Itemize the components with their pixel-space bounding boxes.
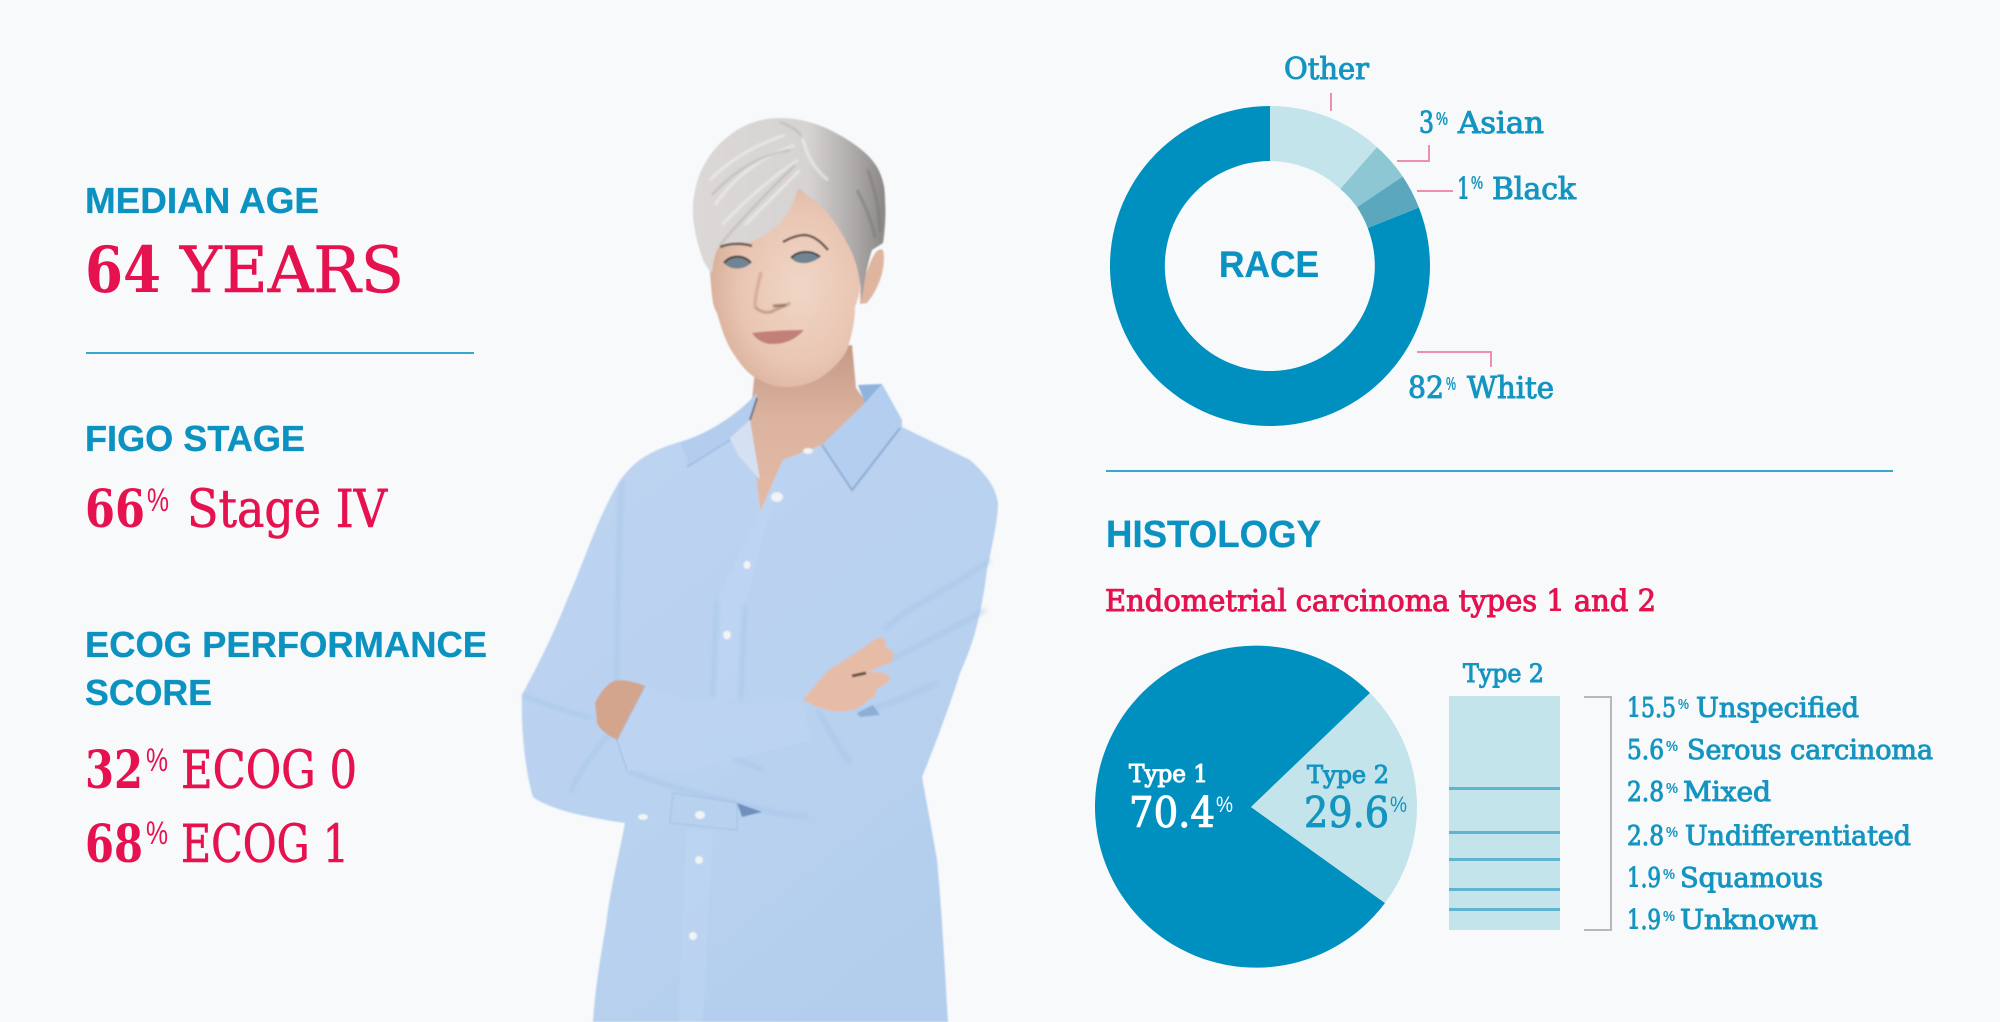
item: mixed bbox=[1627, 777, 1771, 808]
donut title: RACE bbox=[1219, 244, 1319, 285]
label: 82% White: White bbox=[1467, 371, 1554, 406]
item: undifferentiated: Undifferentiated bbox=[1685, 821, 1911, 852]
hair bbox=[693, 118, 885, 300]
subheading: endometrial carcinoma: Endometrial carcinoma types 1 and 2 bbox=[1105, 584, 1656, 619]
label: type 2 bbox=[1304, 761, 1407, 837]
right hand sleeve boundary bbox=[857, 705, 880, 717]
heading: ECOG performance score: SCORE bbox=[85, 672, 212, 713]
panel: ECOG performance score bbox=[85, 624, 487, 875]
eyes bbox=[724, 252, 820, 269]
segment: black bbox=[1357, 176, 1419, 228]
heading: FIGO stage: FIGO STAGE bbox=[85, 418, 305, 459]
item: undifferentiated: 2.8 bbox=[1627, 821, 1664, 852]
label: 82% White: 82 bbox=[1408, 371, 1444, 406]
label: 3% Asian: 3 bbox=[1419, 106, 1434, 141]
value: 32% ECOG 0: 32 bbox=[85, 740, 143, 801]
value: 66% stage IV: Stage IV bbox=[187, 480, 388, 540]
segment: other bbox=[1270, 106, 1377, 189]
neck bbox=[750, 345, 868, 512]
lower sleeve cuff bbox=[670, 793, 737, 830]
value: 68% ECOG 1: % bbox=[146, 815, 168, 851]
item: unspecified: Unspecified bbox=[1696, 693, 1859, 724]
label: type 2: 29.6 bbox=[1304, 788, 1389, 837]
label: type 1: 70.4 bbox=[1129, 788, 1215, 837]
label: type 2: % bbox=[1390, 792, 1407, 817]
item: undifferentiated: % bbox=[1666, 824, 1678, 841]
label: 3% Asian bbox=[1397, 106, 1544, 161]
segment: white bbox=[1110, 106, 1430, 426]
heading: ECOG performance score bbox=[85, 624, 487, 713]
buttons bbox=[638, 448, 813, 940]
chart: type 2 stacked bar bbox=[1449, 659, 1611, 930]
value: 66% stage IV bbox=[85, 479, 388, 540]
nose bbox=[755, 272, 790, 312]
bracket bbox=[1584, 697, 1611, 930]
panel: median age bbox=[85, 180, 404, 308]
value: 66% stage IV: 66 bbox=[85, 479, 145, 540]
value: 32% ECOG 0: ECOG 0 bbox=[181, 741, 357, 801]
eyebrows bbox=[720, 235, 828, 250]
label: 3% Asian: Asian bbox=[1457, 106, 1544, 141]
item: unspecified: 15.5 bbox=[1627, 693, 1676, 724]
hand: left bbox=[595, 680, 645, 740]
value: 68% ECOG 1 bbox=[85, 814, 349, 875]
item: unknown: 1.9 bbox=[1627, 905, 1661, 936]
label: 1% Black bbox=[1417, 172, 1577, 207]
item: squamous: Squamous bbox=[1680, 863, 1823, 894]
bar title: Type 2 bbox=[1463, 659, 1544, 688]
photo: woman with crossed arms bbox=[522, 118, 998, 1022]
crossed forearm cuff bbox=[617, 686, 810, 770]
placket bbox=[713, 480, 778, 700]
bar bbox=[1449, 696, 1560, 930]
slice: type 1 bbox=[1095, 646, 1385, 968]
value: 32% ECOG 0 bbox=[85, 740, 357, 801]
label: other bbox=[1284, 52, 1369, 111]
ear bbox=[860, 249, 884, 304]
shirt silhouette bbox=[522, 384, 998, 1022]
item: serous carcinoma: 5.6 bbox=[1627, 735, 1664, 766]
item: unspecified: % bbox=[1678, 696, 1689, 713]
item: squamous: 1.9 bbox=[1627, 863, 1661, 894]
chart: type pie bbox=[1095, 646, 1417, 968]
hand: right bbox=[803, 637, 893, 712]
value: 64 years: 64 bbox=[85, 233, 161, 308]
heading: ECOG performance score: ECOG PERFORMANCE bbox=[85, 624, 487, 665]
item: squamous bbox=[1627, 863, 1823, 894]
finger shadow bbox=[852, 673, 866, 676]
label: 1% Black: % bbox=[1471, 173, 1483, 193]
value: 68% ECOG 1: ECOG 1 bbox=[181, 815, 349, 875]
heading: histology: HISTOLOGY bbox=[1106, 514, 1321, 556]
item: unknown: % bbox=[1663, 908, 1675, 925]
list: type 2 breakdown bbox=[1627, 693, 1933, 936]
chart: race donut bbox=[1110, 106, 1430, 426]
value: 64 years: YEARS bbox=[179, 234, 404, 308]
label: type 2: Type 2 bbox=[1307, 761, 1389, 789]
label: 3% Asian: % bbox=[1436, 109, 1448, 129]
segment: asian bbox=[1340, 147, 1403, 207]
value: 32% ECOG 0: % bbox=[146, 742, 168, 778]
item: unspecified bbox=[1627, 693, 1859, 724]
shirt fold lines bbox=[523, 425, 990, 817]
item: serous carcinoma: % bbox=[1666, 738, 1678, 755]
label: type 1: Type 1 bbox=[1129, 760, 1208, 788]
label: 1% Black: Black bbox=[1492, 172, 1577, 207]
label: type 1 bbox=[1129, 760, 1233, 837]
item: squamous: % bbox=[1663, 866, 1675, 883]
label: 82% White: % bbox=[1446, 374, 1456, 394]
panel: histology bbox=[1095, 514, 1933, 968]
item: mixed: Mixed bbox=[1683, 777, 1771, 808]
panel: FIGO stage bbox=[85, 418, 388, 540]
item: unknown: Unknown bbox=[1680, 905, 1818, 936]
label: other: Other bbox=[1284, 52, 1369, 87]
label: 82% White bbox=[1408, 352, 1554, 406]
collar left bbox=[680, 393, 760, 480]
item: mixed: % bbox=[1666, 780, 1678, 797]
mouth bbox=[752, 330, 804, 344]
value: 66% stage IV: % bbox=[147, 482, 169, 518]
slice: type 2 bbox=[1251, 693, 1417, 903]
label: 1% Black: 1 bbox=[1457, 172, 1470, 207]
item: unknown bbox=[1627, 905, 1818, 936]
collar right bbox=[822, 384, 902, 490]
face bbox=[710, 188, 860, 387]
item: serous carcinoma: Serous carcinoma bbox=[1687, 735, 1933, 766]
heading: median age: MEDIAN AGE bbox=[85, 180, 319, 221]
label: type 1: % bbox=[1216, 792, 1233, 817]
item: mixed: 2.8 bbox=[1627, 777, 1664, 808]
value: 64 years bbox=[85, 233, 404, 308]
value: 68% ECOG 1: 68 bbox=[85, 814, 143, 875]
